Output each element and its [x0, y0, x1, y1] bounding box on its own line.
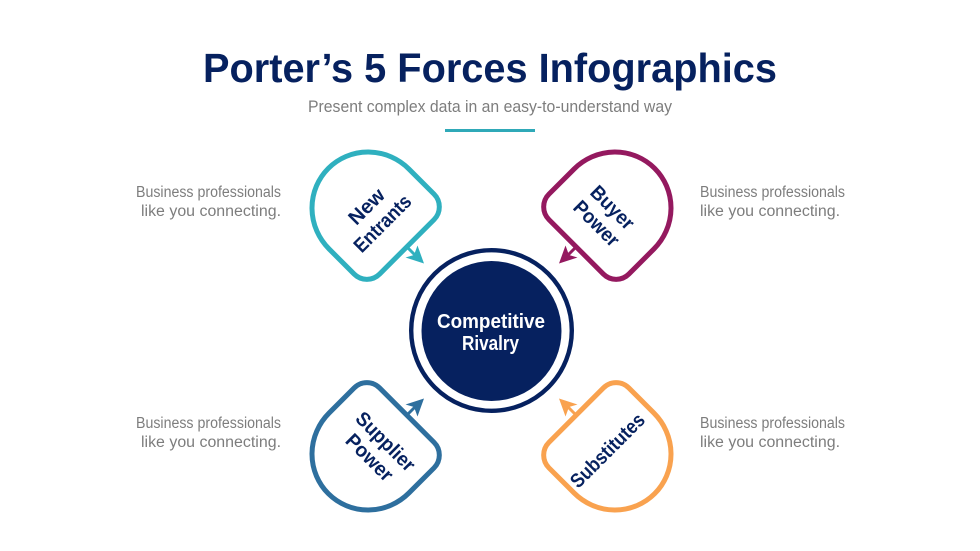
- text block: top left: [136, 184, 281, 220]
- text block: bottom left: Business professionals: [136, 415, 281, 432]
- shape: Supplier Power: [288, 375, 447, 534]
- label: Buyer Power: [568, 181, 639, 252]
- text block: top right: [700, 184, 845, 220]
- label: New Entrants: New: [344, 184, 390, 230]
- label: Competitive: Competitive: [437, 311, 545, 333]
- text block: top right: like you connecting.: [700, 203, 840, 220]
- label: Supplier Power: Power: [341, 430, 397, 486]
- panel: Buyer Power: [536, 128, 695, 287]
- text block: bottom right: like you connecting.: [700, 434, 840, 451]
- subtitle: Present complex data in an easy-to-understand way: [308, 98, 673, 116]
- shape: New Entrants: [288, 128, 447, 287]
- text block: bottom left: like you connecting.: [141, 434, 281, 451]
- inner disc: [422, 261, 562, 401]
- label: Rivalry: Rivalry: [462, 333, 520, 355]
- label: Buyer Power: Power: [568, 196, 624, 252]
- title: Porter’s 5 Forces Infographics: [203, 45, 777, 91]
- shape: Substitutes: [536, 375, 695, 534]
- arrow: Supplier Power to center: [402, 398, 424, 420]
- text block: bottom left: [136, 415, 281, 451]
- label: Buyer Power: Buyer: [585, 181, 639, 235]
- title accent line: [445, 129, 535, 132]
- shape: Buyer Power: [536, 128, 695, 287]
- label: Substitutes: Substitutes: [566, 409, 650, 493]
- text block: bottom right: [700, 415, 845, 451]
- outer ring: [411, 250, 572, 411]
- panel: Supplier Power: [288, 375, 447, 534]
- label: Supplier Power: Supplier: [351, 408, 419, 476]
- text block: top right: Business professionals: [700, 184, 845, 201]
- panel: Substitutes: [536, 375, 695, 534]
- arrow: Buyer Power to center: [559, 242, 581, 264]
- panel: Competitive Rivalry center: [411, 250, 572, 411]
- label: New Entrants: Entrants: [350, 191, 416, 257]
- text block: top left: like you connecting.: [141, 203, 281, 220]
- text block: top left: Business professionals: [136, 184, 281, 201]
- panel: New Entrants: [288, 128, 447, 287]
- arrow: Substitutes to center: [559, 398, 581, 420]
- text block: bottom right: Business professionals: [700, 415, 845, 432]
- arrow: New Entrants to center: [402, 242, 424, 264]
